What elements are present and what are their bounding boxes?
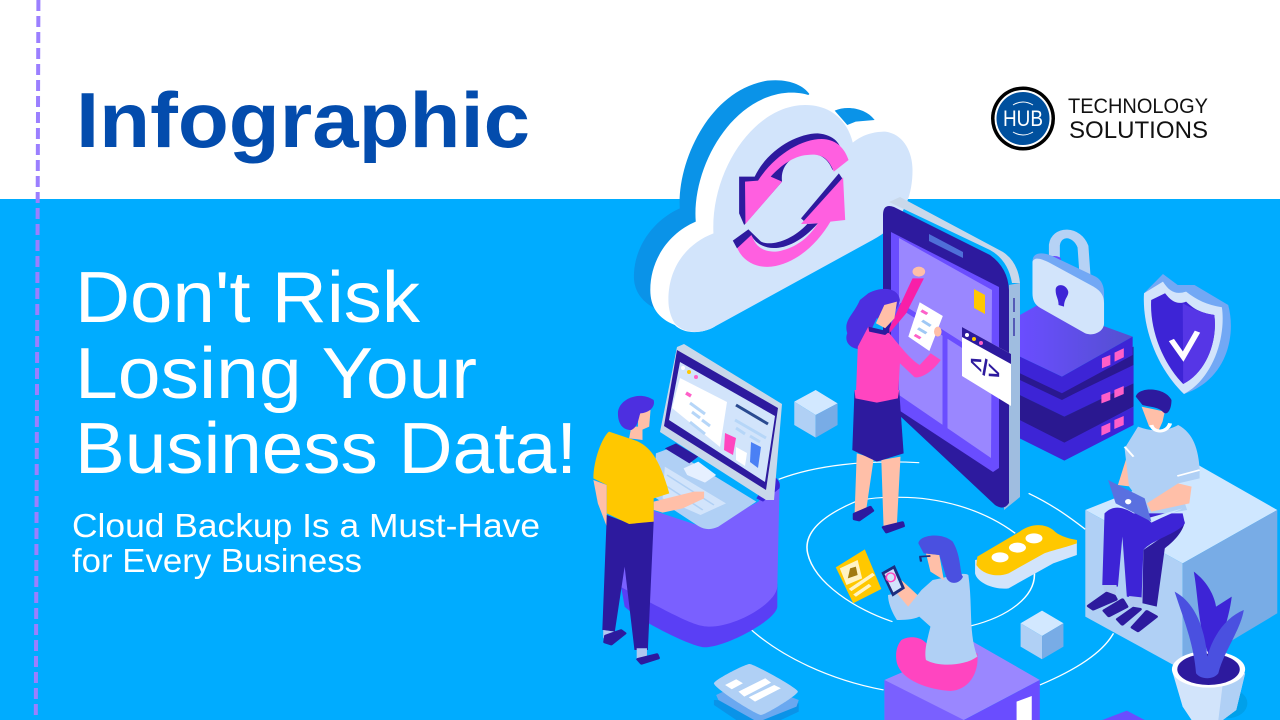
- blue background panel: [0, 199, 1280, 720]
- code window: [962, 327, 1011, 406]
- ID card: [836, 549, 881, 603]
- subtitle: [72, 507, 540, 579]
- seat box with pink cushion: [884, 637, 1040, 720]
- laptop on desk: [654, 344, 782, 529]
- main heading: [75, 258, 577, 489]
- partial purple box at bottom edge: [1102, 711, 1145, 720]
- plant: [1172, 572, 1247, 720]
- logo: HUB Technology Solutions: SOLUTIONS: [1069, 117, 1208, 144]
- title: Infographic: [76, 76, 530, 164]
- code window: </>: [970, 347, 1000, 389]
- main heading: Losing Your: [75, 334, 477, 414]
- main heading: Don't Risk: [75, 258, 421, 338]
- person: woman at phone: [846, 267, 943, 532]
- small cube: [1021, 611, 1063, 659]
- person: man at laptop: [593, 396, 704, 663]
- subtitle: for Every Business: [72, 542, 362, 579]
- icon: server stack: [1020, 303, 1134, 461]
- phone device: [883, 197, 1020, 510]
- icon: security shield: [1144, 274, 1231, 394]
- stacked documents: [714, 664, 799, 720]
- main heading: Business Data!: [75, 409, 577, 489]
- small cube: [794, 390, 838, 438]
- password card: [975, 525, 1077, 589]
- icon: padlock: [1032, 234, 1104, 334]
- box seat and man with laptop: [1085, 390, 1277, 670]
- person: seated woman with phone: [881, 535, 977, 665]
- purple desk: [620, 475, 780, 647]
- subtitle: Cloud Backup Is a Must-Have: [72, 507, 540, 544]
- icon: cloud with sync arrows: [634, 80, 913, 332]
- network orbit lines: [750, 462, 1113, 690]
- logo: HUB Technology Solutions: HUB: [1003, 106, 1043, 131]
- logo: HUB Technology Solutions: [991, 86, 1208, 150]
- logo: HUB Technology Solutions: TECHNOLOGY: [1068, 94, 1208, 118]
